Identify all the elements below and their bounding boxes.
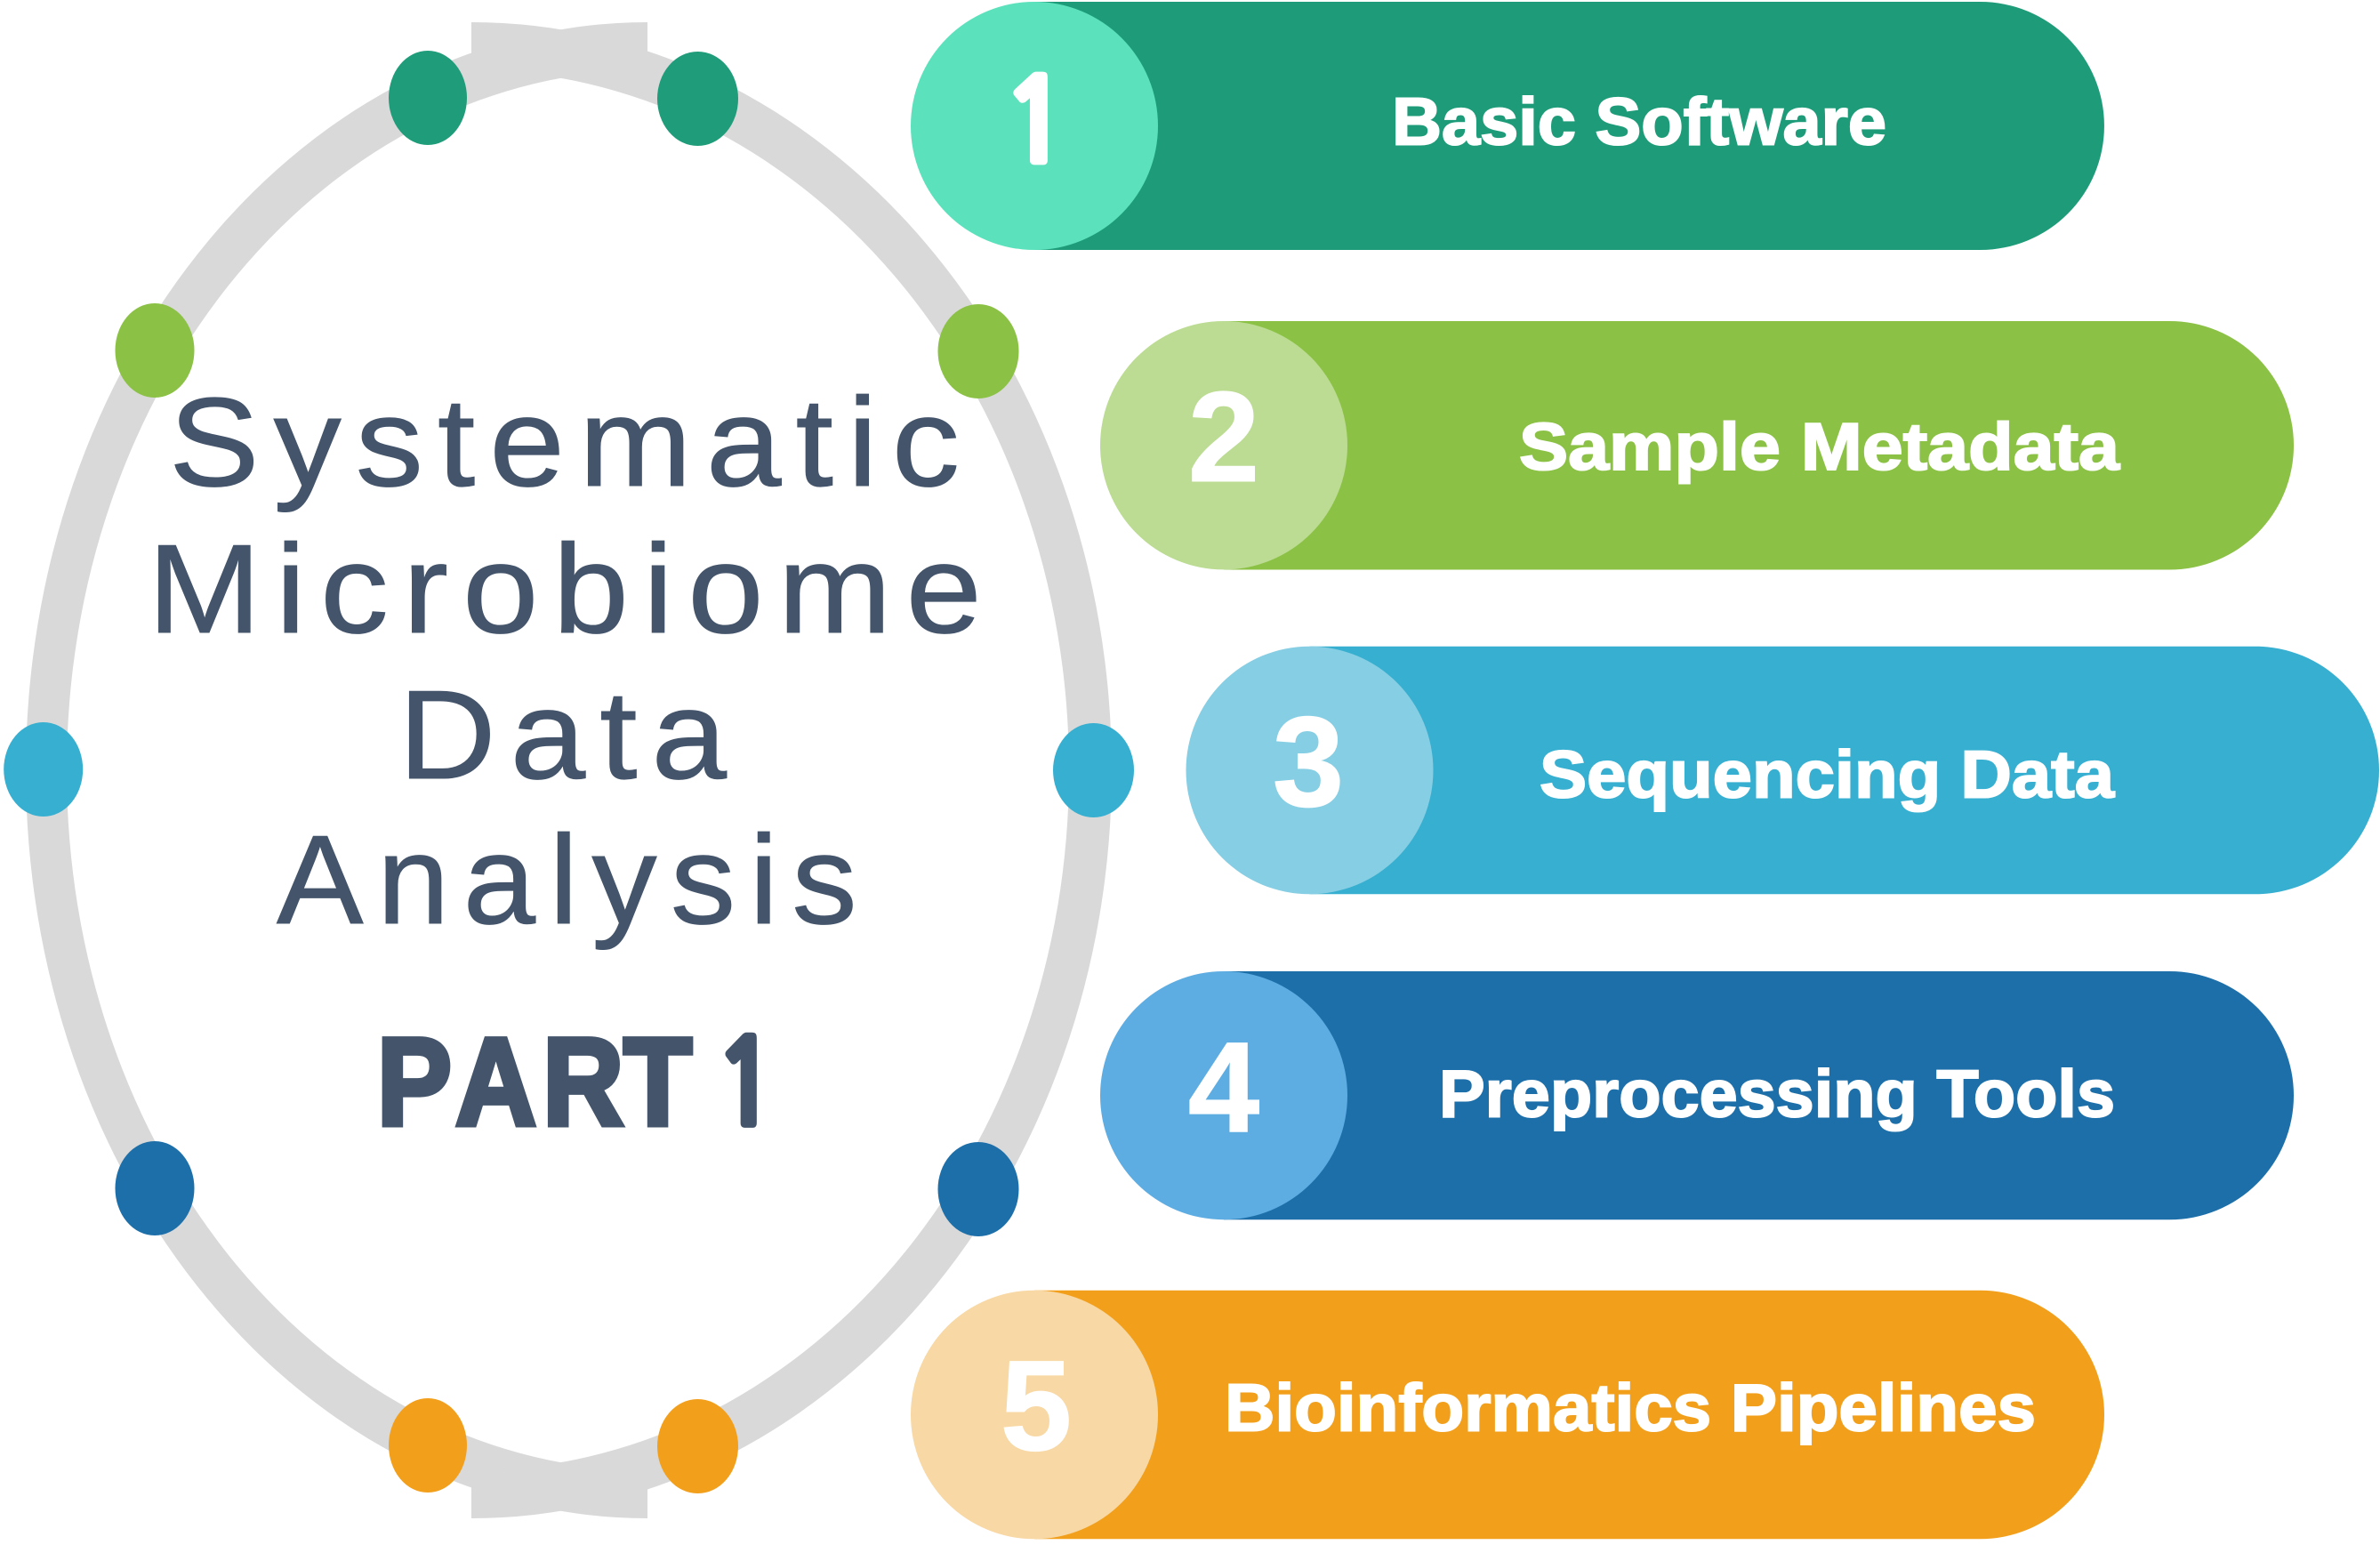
dot: upper right green	[937, 304, 1019, 398]
pill 1	[1034, 2, 2104, 250]
panel: step 3	[1186, 647, 2379, 894]
dot: upper left green	[116, 303, 194, 398]
title	[148, 372, 996, 1152]
pill 4	[1224, 971, 2294, 1219]
subtitle: part 1: 1	[714, 1026, 778, 1142]
label: Sequencing Data: Sequencing Data	[1540, 737, 2115, 812]
dot: middle right blue	[1053, 723, 1134, 817]
subtitle: part 1: R	[543, 1012, 623, 1152]
dot: top right	[657, 52, 738, 146]
label: Bioinformatics Pipelines: Bioinformatics Pipelines	[1225, 1371, 2036, 1445]
title line 4: Analysis	[277, 809, 871, 951]
number 5: 5	[1001, 1334, 1072, 1477]
panel: step 1	[911, 2, 2104, 250]
ring: left arc	[26, 22, 647, 1518]
dot: bottom left orange	[389, 1398, 467, 1493]
label: Preprocessing Tools: Preprocessing Tools	[1439, 1057, 2115, 1131]
label: Basic Software: Basic Software	[1392, 84, 1886, 159]
dot: bottom right orange	[657, 1399, 738, 1493]
circle 5	[911, 1291, 1158, 1539]
dot: lower left navy	[116, 1141, 194, 1235]
dot: lower right navy	[937, 1142, 1019, 1236]
pill 5	[1034, 1291, 2104, 1539]
pill 2	[1224, 321, 2294, 569]
panel: step 4	[1100, 971, 2294, 1219]
dot: top left	[389, 51, 467, 145]
title line 1: Systematic	[169, 372, 974, 513]
subtitle: part 1: A	[455, 1012, 536, 1152]
ring with dots	[4, 22, 1134, 1518]
label: Sample Metadata: Sample Metadata	[1519, 409, 2120, 484]
pill 3	[1309, 647, 2379, 894]
title line 3: Data	[398, 664, 741, 806]
circle 3	[1186, 647, 1434, 894]
circle 4	[1100, 971, 1347, 1219]
number 1: 1	[1001, 66, 1071, 180]
number 4: 4	[1188, 1016, 1259, 1159]
circle 1	[911, 2, 1158, 250]
dot: middle left blue	[4, 722, 83, 817]
title line 2: Microbiome	[148, 519, 996, 660]
number 3: 3	[1273, 690, 1344, 833]
subtitle: part 1: T	[623, 1012, 692, 1152]
subtitle: part 1: P	[377, 1012, 452, 1152]
number 2: 2	[1188, 366, 1259, 509]
panel: step 2	[1100, 321, 2294, 569]
ring: right arc	[471, 22, 1112, 1518]
circle 2	[1100, 321, 1347, 569]
panel: step 5	[911, 1291, 2104, 1539]
